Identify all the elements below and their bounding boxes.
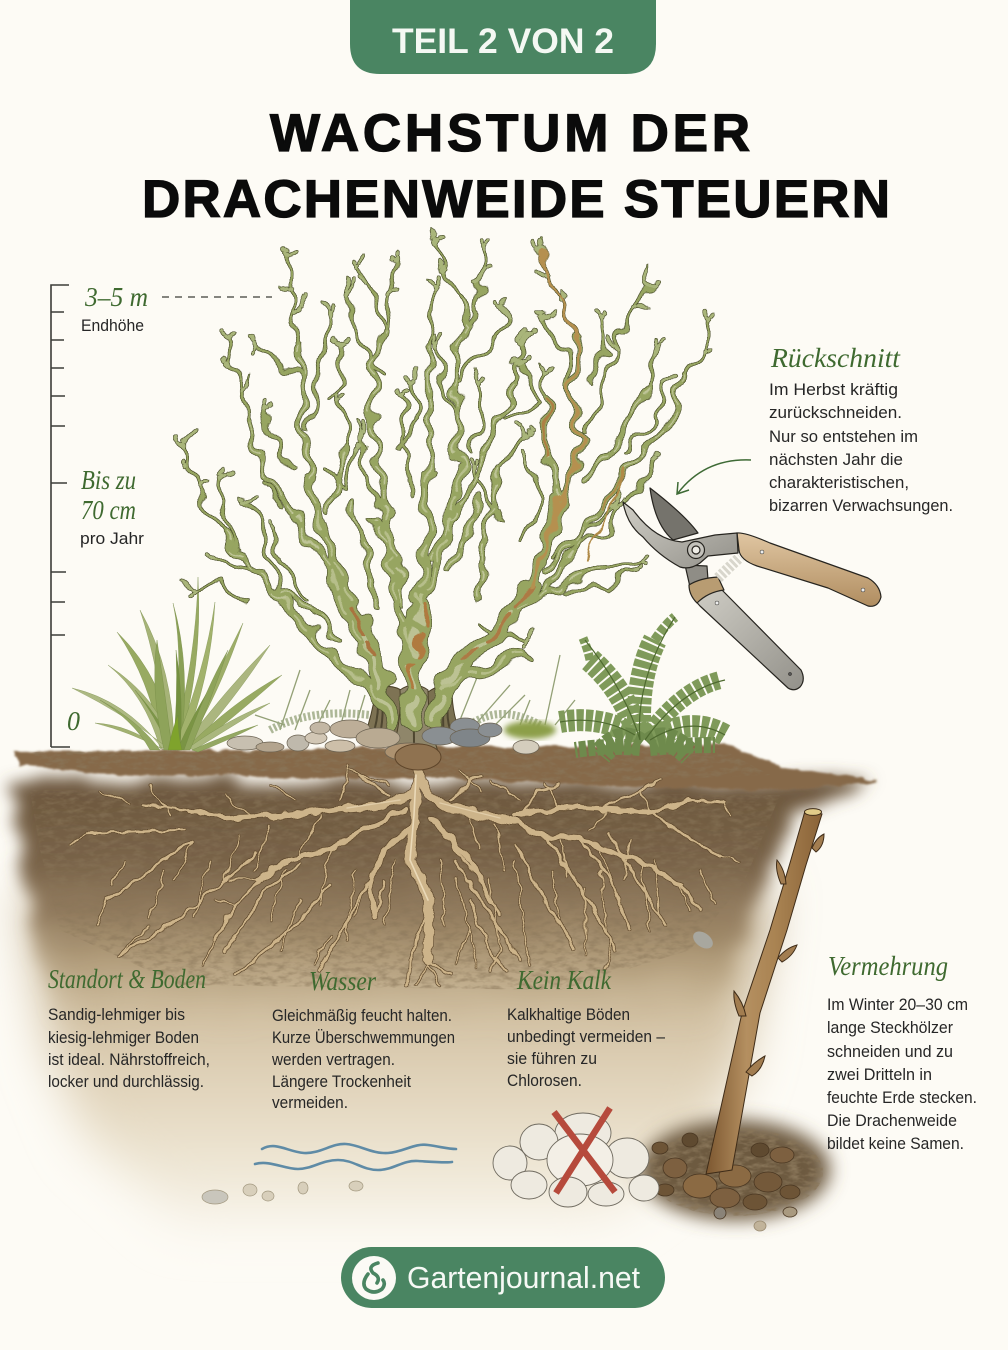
footer brand pill: Gartenjournal.net — [407, 1260, 640, 1295]
label: zero: 0 — [67, 706, 80, 736]
text: Vermehrung: Die Drachenweide — [827, 1112, 957, 1130]
arrow to pruners — [677, 460, 751, 494]
label: final height: 3–5 m — [84, 282, 148, 312]
text: Vermehrung: zwei Dritteln in — [827, 1066, 932, 1084]
illustration: dragon willow tree — [179, 230, 717, 752]
text: Wasser: vermeiden. — [272, 1094, 348, 1112]
text: Standort und Boden: kiesig-lehmiger Boden — [48, 1029, 199, 1047]
text: Standort und Boden: ist ideal. Nährstoffreich, — [48, 1051, 210, 1069]
text: Vermehrung: Im Winter 20–30 cm — [827, 996, 968, 1014]
footer brand pill — [341, 1247, 665, 1308]
text: Vermehrung: schneiden und zu — [827, 1043, 953, 1061]
text: Kein Kalk: Chlorosen. — [507, 1072, 582, 1090]
soil cross-section — [8, 744, 878, 1225]
text: Rückschnitt: nächsten Jahr die — [769, 451, 903, 469]
ruler: height scale — [51, 285, 272, 747]
text: Standort und Boden: locker und durchlässig. — [48, 1073, 204, 1091]
title: WACHSTUM DER — [270, 104, 750, 163]
text: Wasser: Längere Trockenheit — [272, 1073, 411, 1091]
text: Wasser: werden vertragen. — [271, 1051, 395, 1069]
text: Vermehrung — [827, 951, 977, 1153]
illustration: willow cutting — [706, 809, 824, 1174]
text: Kein Kalk: Kein Kalk — [516, 965, 612, 995]
text: Kein Kalk: sie führen zu — [507, 1050, 597, 1068]
text: Rückschnitt: Nur so entstehen im — [769, 428, 918, 446]
title pill — [350, 0, 656, 74]
red cross — [554, 1108, 615, 1193]
trunk base — [364, 685, 462, 752]
title: DRACHENWEIDE STEUERN — [142, 170, 890, 229]
text: Kein Kalk: Kalkhaltige Böden — [507, 1006, 630, 1024]
text: Standort und Boden — [48, 964, 210, 1091]
label: yearly growth: 70 cm — [81, 495, 136, 525]
illustration: stones on ground — [227, 718, 539, 761]
text: Vermehrung: Vermehrung — [828, 951, 948, 981]
text: Vermehrung: bildet keine Samen. — [827, 1135, 964, 1153]
root knot — [395, 744, 441, 770]
text: Wasser — [271, 966, 455, 1112]
illustration: low grass and herbs by the trunk — [255, 655, 575, 730]
title — [142, 104, 890, 229]
text: Wasser: Kurze Überschwemmungen — [272, 1029, 455, 1047]
text: Rückschnitt: bizarren Verwachsungen. — [769, 497, 953, 515]
illustration: small pebbles — [202, 928, 716, 1204]
illustration: grass tuft — [72, 577, 282, 752]
label: final height: Endhöhe — [81, 317, 144, 335]
text: Wasser: Gleichmäßig feucht halten. — [272, 1007, 452, 1025]
illustration: planting soil mound — [640, 1120, 830, 1231]
illustration: limestones with red cross — [493, 1108, 659, 1207]
title pill: TEIL 2 VON 2 — [392, 22, 614, 61]
icon: logo — [352, 1256, 396, 1300]
text: Kein Kalk — [507, 965, 666, 1090]
illustration: water waves — [255, 1144, 456, 1170]
text: Rückschnitt — [769, 343, 953, 515]
text: Rückschnitt: Rückschnitt — [770, 343, 902, 373]
branch highlights and bark — [222, 250, 684, 725]
text: Vermehrung: feuchte Erde stecken. — [827, 1089, 977, 1107]
illustration: fern — [504, 617, 725, 755]
illustration: root knot and root system — [70, 744, 740, 985]
label: yearly growth: Bis zu — [81, 465, 136, 495]
label: final height — [81, 282, 148, 335]
text: Standort und Boden: Sandig-lehmiger bis — [48, 1006, 185, 1024]
illustration: pruning shears — [623, 488, 881, 690]
text: Rückschnitt: Im Herbst kräftig — [769, 381, 898, 399]
text: Kein Kalk: unbedingt vermeiden – — [507, 1028, 666, 1046]
text: Standort und Boden: Standort & Boden — [48, 964, 206, 994]
text: Rückschnitt: charakteristischen, — [769, 474, 909, 492]
text: Vermehrung: lange Steckhölzer — [827, 1019, 954, 1037]
branches — [179, 230, 717, 725]
text: Wasser: Wasser — [309, 966, 376, 996]
label: yearly growth — [80, 465, 145, 548]
text: Rückschnitt: zurückschneiden. — [769, 404, 902, 422]
label: yearly growth: pro Jahr — [80, 530, 145, 548]
